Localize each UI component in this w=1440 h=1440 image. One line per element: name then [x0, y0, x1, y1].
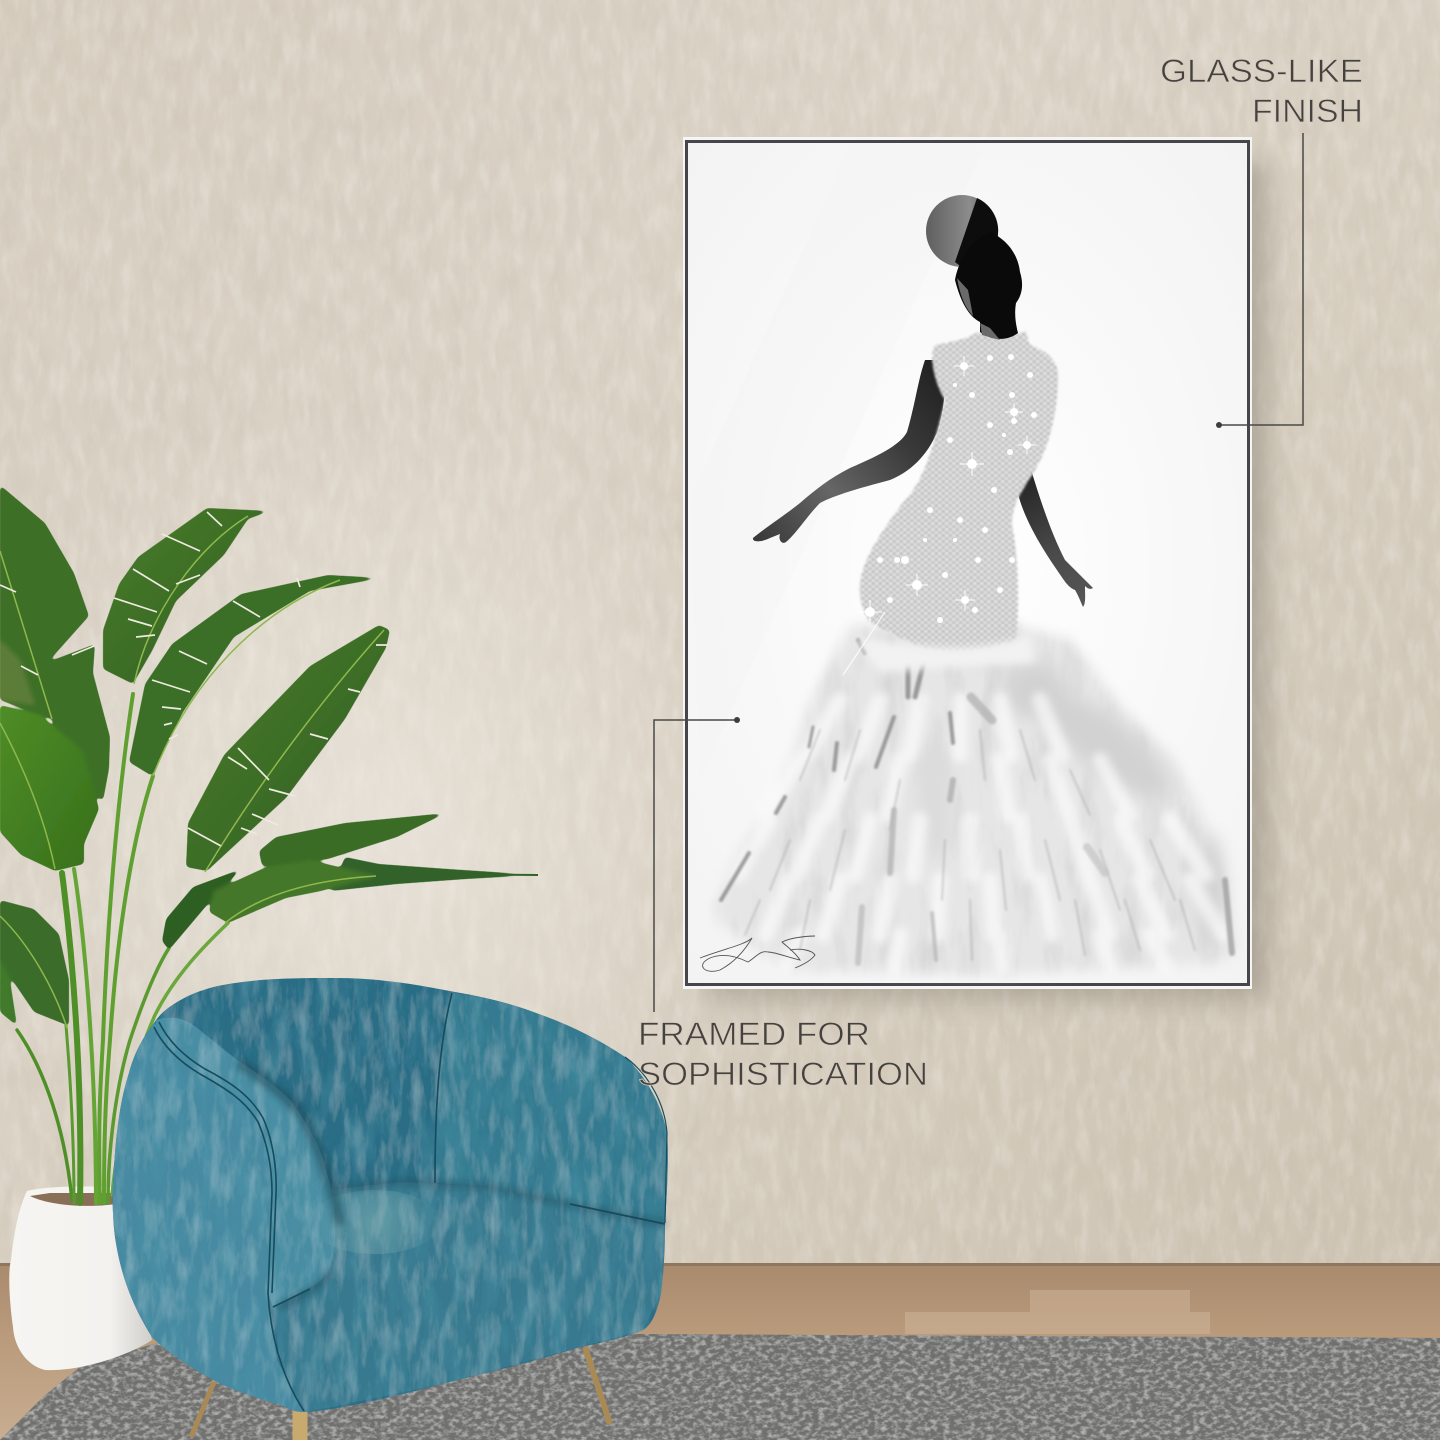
chair back and base shape — [113, 978, 668, 1412]
chair left arm — [113, 1023, 304, 1412]
seat light patch — [310, 1190, 440, 1254]
leaf upper left — [0, 485, 110, 801]
fine feather barbs — [745, 730, 1195, 960]
chair arm cushion — [154, 1018, 335, 1307]
leaf upper left front — [0, 705, 99, 871]
frame — [683, 137, 1252, 989]
label text: SOPHISTICATION — [638, 1056, 928, 1092]
plant pot — [9, 1186, 152, 1370]
leader line — [1216, 133, 1303, 428]
glass reflections — [690, 145, 985, 780]
artwork shadow on wall — [705, 160, 1267, 998]
chair seat — [273, 1182, 665, 1412]
framed artwork — [683, 137, 1252, 989]
label text — [638, 1016, 928, 1092]
leaf low front — [209, 860, 376, 923]
gown base — [716, 625, 1238, 975]
leaf bottom left — [0, 900, 69, 1026]
label text: FINISH — [1252, 93, 1363, 129]
leaf low upper — [259, 813, 446, 866]
figure: arms — [753, 360, 1093, 607]
figure: sequinned bodice — [843, 330, 1058, 675]
grey shoulder shading — [917, 662, 1224, 945]
leaf middle — [129, 575, 382, 776]
leaf midribs — [0, 516, 384, 1028]
label text: GLASS-LIKE — [1160, 53, 1363, 89]
chair right back panel — [435, 993, 668, 1223]
plant leaves — [0, 485, 538, 1026]
leaf bottom left small — [0, 958, 17, 1026]
figure: halo disc — [926, 195, 998, 285]
white feather tufts — [738, 700, 1223, 968]
grey feather streaks — [721, 640, 1232, 963]
background: wooden floor — [0, 1263, 1440, 1440]
armchair — [113, 978, 668, 1440]
background: grey shag rug — [0, 1334, 1440, 1440]
chair body — [113, 978, 668, 1412]
leaf top centre — [103, 508, 270, 684]
chair seams and piping — [154, 993, 667, 1411]
plant — [0, 485, 538, 1370]
callout: glass-like finish — [1160, 53, 1363, 428]
leader line — [654, 717, 740, 1012]
figure: head and neck — [955, 232, 1022, 340]
callout: framed for sophistication — [638, 717, 928, 1092]
bodice hem fade into feathers — [855, 635, 1035, 672]
plant stems — [17, 694, 228, 1203]
figure: feathered gown — [716, 625, 1238, 975]
leaf low back — [162, 869, 241, 950]
leaf upper left shade — [0, 640, 35, 705]
leaf long tip — [440, 874, 538, 875]
chair shading — [238, 1062, 665, 1308]
leaf low long — [331, 857, 538, 891]
leaf tear notches — [0, 512, 388, 846]
signature — [700, 936, 815, 971]
label text — [1160, 53, 1363, 129]
sparkles — [865, 354, 1037, 623]
leaf large right — [186, 625, 390, 871]
label text: FRAMED FOR — [638, 1016, 870, 1052]
chair legs — [191, 1347, 610, 1440]
